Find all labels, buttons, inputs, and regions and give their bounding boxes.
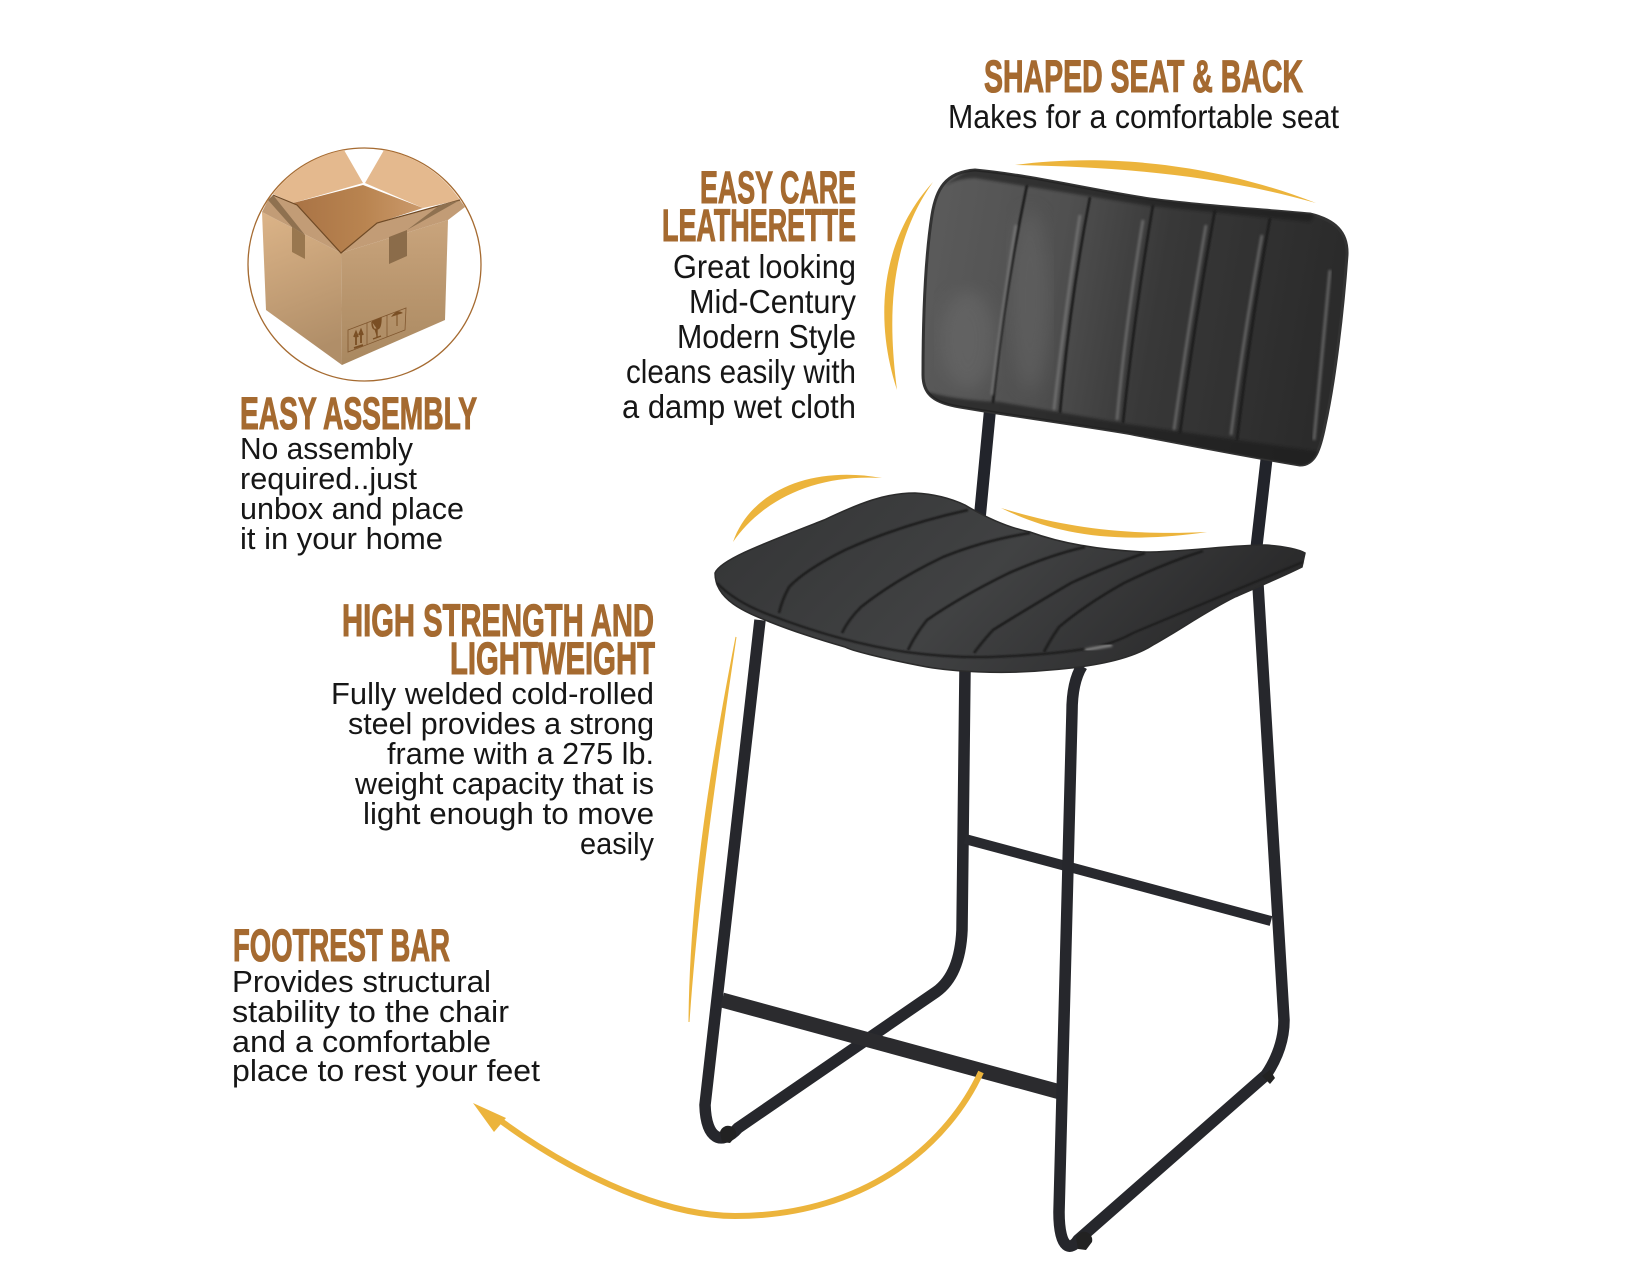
- description: easily: [580, 826, 654, 861]
- arrow: footrest callout: [473, 1072, 981, 1216]
- description: light enough to move: [363, 796, 654, 831]
- description: steel provides a strong: [348, 706, 654, 741]
- description: frame with a 275 lb.: [387, 736, 654, 771]
- front flaps: [262, 195, 465, 253]
- description: [232, 964, 540, 1088]
- arc: top of back: [1015, 160, 1316, 203]
- text: shaped seat and back: [948, 51, 1339, 135]
- back flaps: [273, 150, 460, 208]
- seat rim: [717, 562, 1303, 657]
- description: cleans easily with: [626, 353, 856, 390]
- back shape: [923, 170, 1347, 465]
- heading: [662, 162, 856, 251]
- description: [331, 676, 654, 861]
- description: Great looking: [673, 248, 856, 285]
- chair seat cushion: [715, 493, 1305, 672]
- chair frame: rear tube: [705, 620, 965, 1138]
- description: Mid-Century: [689, 283, 856, 320]
- seat seams: [779, 510, 1203, 653]
- back uprights: [980, 410, 1267, 560]
- arc: leg height: [689, 637, 736, 1022]
- right face: [341, 220, 448, 365]
- description: Makes for a comfortable seat: [948, 98, 1339, 135]
- left face: [262, 212, 342, 365]
- shipping symbols: [348, 308, 406, 352]
- description: [240, 431, 464, 556]
- description: Fully welded cold-rolled: [331, 676, 654, 711]
- description: unbox and place: [240, 491, 464, 526]
- seat shape: [715, 493, 1305, 672]
- arrow shaft: [497, 1072, 981, 1216]
- yellow callout arcs: [689, 160, 1316, 1022]
- heading: FOOTREST BAR: [233, 920, 450, 971]
- tape right: [389, 230, 407, 264]
- arc: side of back: [884, 182, 933, 390]
- arrow head: [473, 1103, 506, 1132]
- heading: LEATHERETTE: [662, 200, 856, 251]
- footrest bar: [722, 1000, 1060, 1092]
- description: a damp wet cloth: [622, 388, 856, 425]
- tape left: [292, 227, 305, 259]
- heading: EASY CARE: [700, 162, 856, 213]
- heading: [342, 595, 655, 684]
- back seams: [992, 185, 1270, 440]
- description: and a comfortable: [232, 1024, 491, 1059]
- box interior: [293, 185, 423, 253]
- flap shading: [268, 195, 460, 235]
- description: weight capacity that is: [354, 766, 654, 801]
- circle outline: [248, 148, 481, 381]
- description: [622, 248, 856, 425]
- description: place to rest your feet: [232, 1053, 540, 1088]
- arc: seat rear: [1001, 508, 1207, 538]
- chair frame: upper crossbar: [965, 839, 1271, 921]
- flap edges: [273, 195, 460, 253]
- heading: LIGHTWEIGHT: [450, 633, 655, 684]
- description: required..just: [240, 461, 417, 496]
- heading: SHAPED SEAT & BACK: [984, 51, 1303, 102]
- text: high strength and lightweight: [331, 595, 655, 861]
- description: Modern Style: [677, 318, 856, 355]
- seat rim highlight: [1085, 645, 1112, 650]
- text: easy care leatherette: [622, 162, 856, 425]
- description: it in your home: [240, 521, 443, 556]
- description: Provides structural: [232, 964, 491, 999]
- heading: EASY ASSEMBLY: [240, 388, 477, 439]
- chair feet: [720, 1070, 1275, 1250]
- icon: cardboard box in circle: [248, 148, 481, 381]
- back highlights: [922, 165, 1350, 475]
- chair frame: front tube: [1059, 585, 1284, 1246]
- chair photo: [705, 165, 1350, 1250]
- text: easy assembly: [240, 388, 477, 556]
- heading: HIGH STRENGTH AND: [342, 595, 654, 646]
- chair back cushion: [922, 165, 1350, 475]
- description: No assembly: [240, 431, 413, 466]
- text: footrest bar: [232, 920, 540, 1088]
- description: stability to the chair: [232, 994, 509, 1029]
- arc: seat left: [733, 475, 882, 542]
